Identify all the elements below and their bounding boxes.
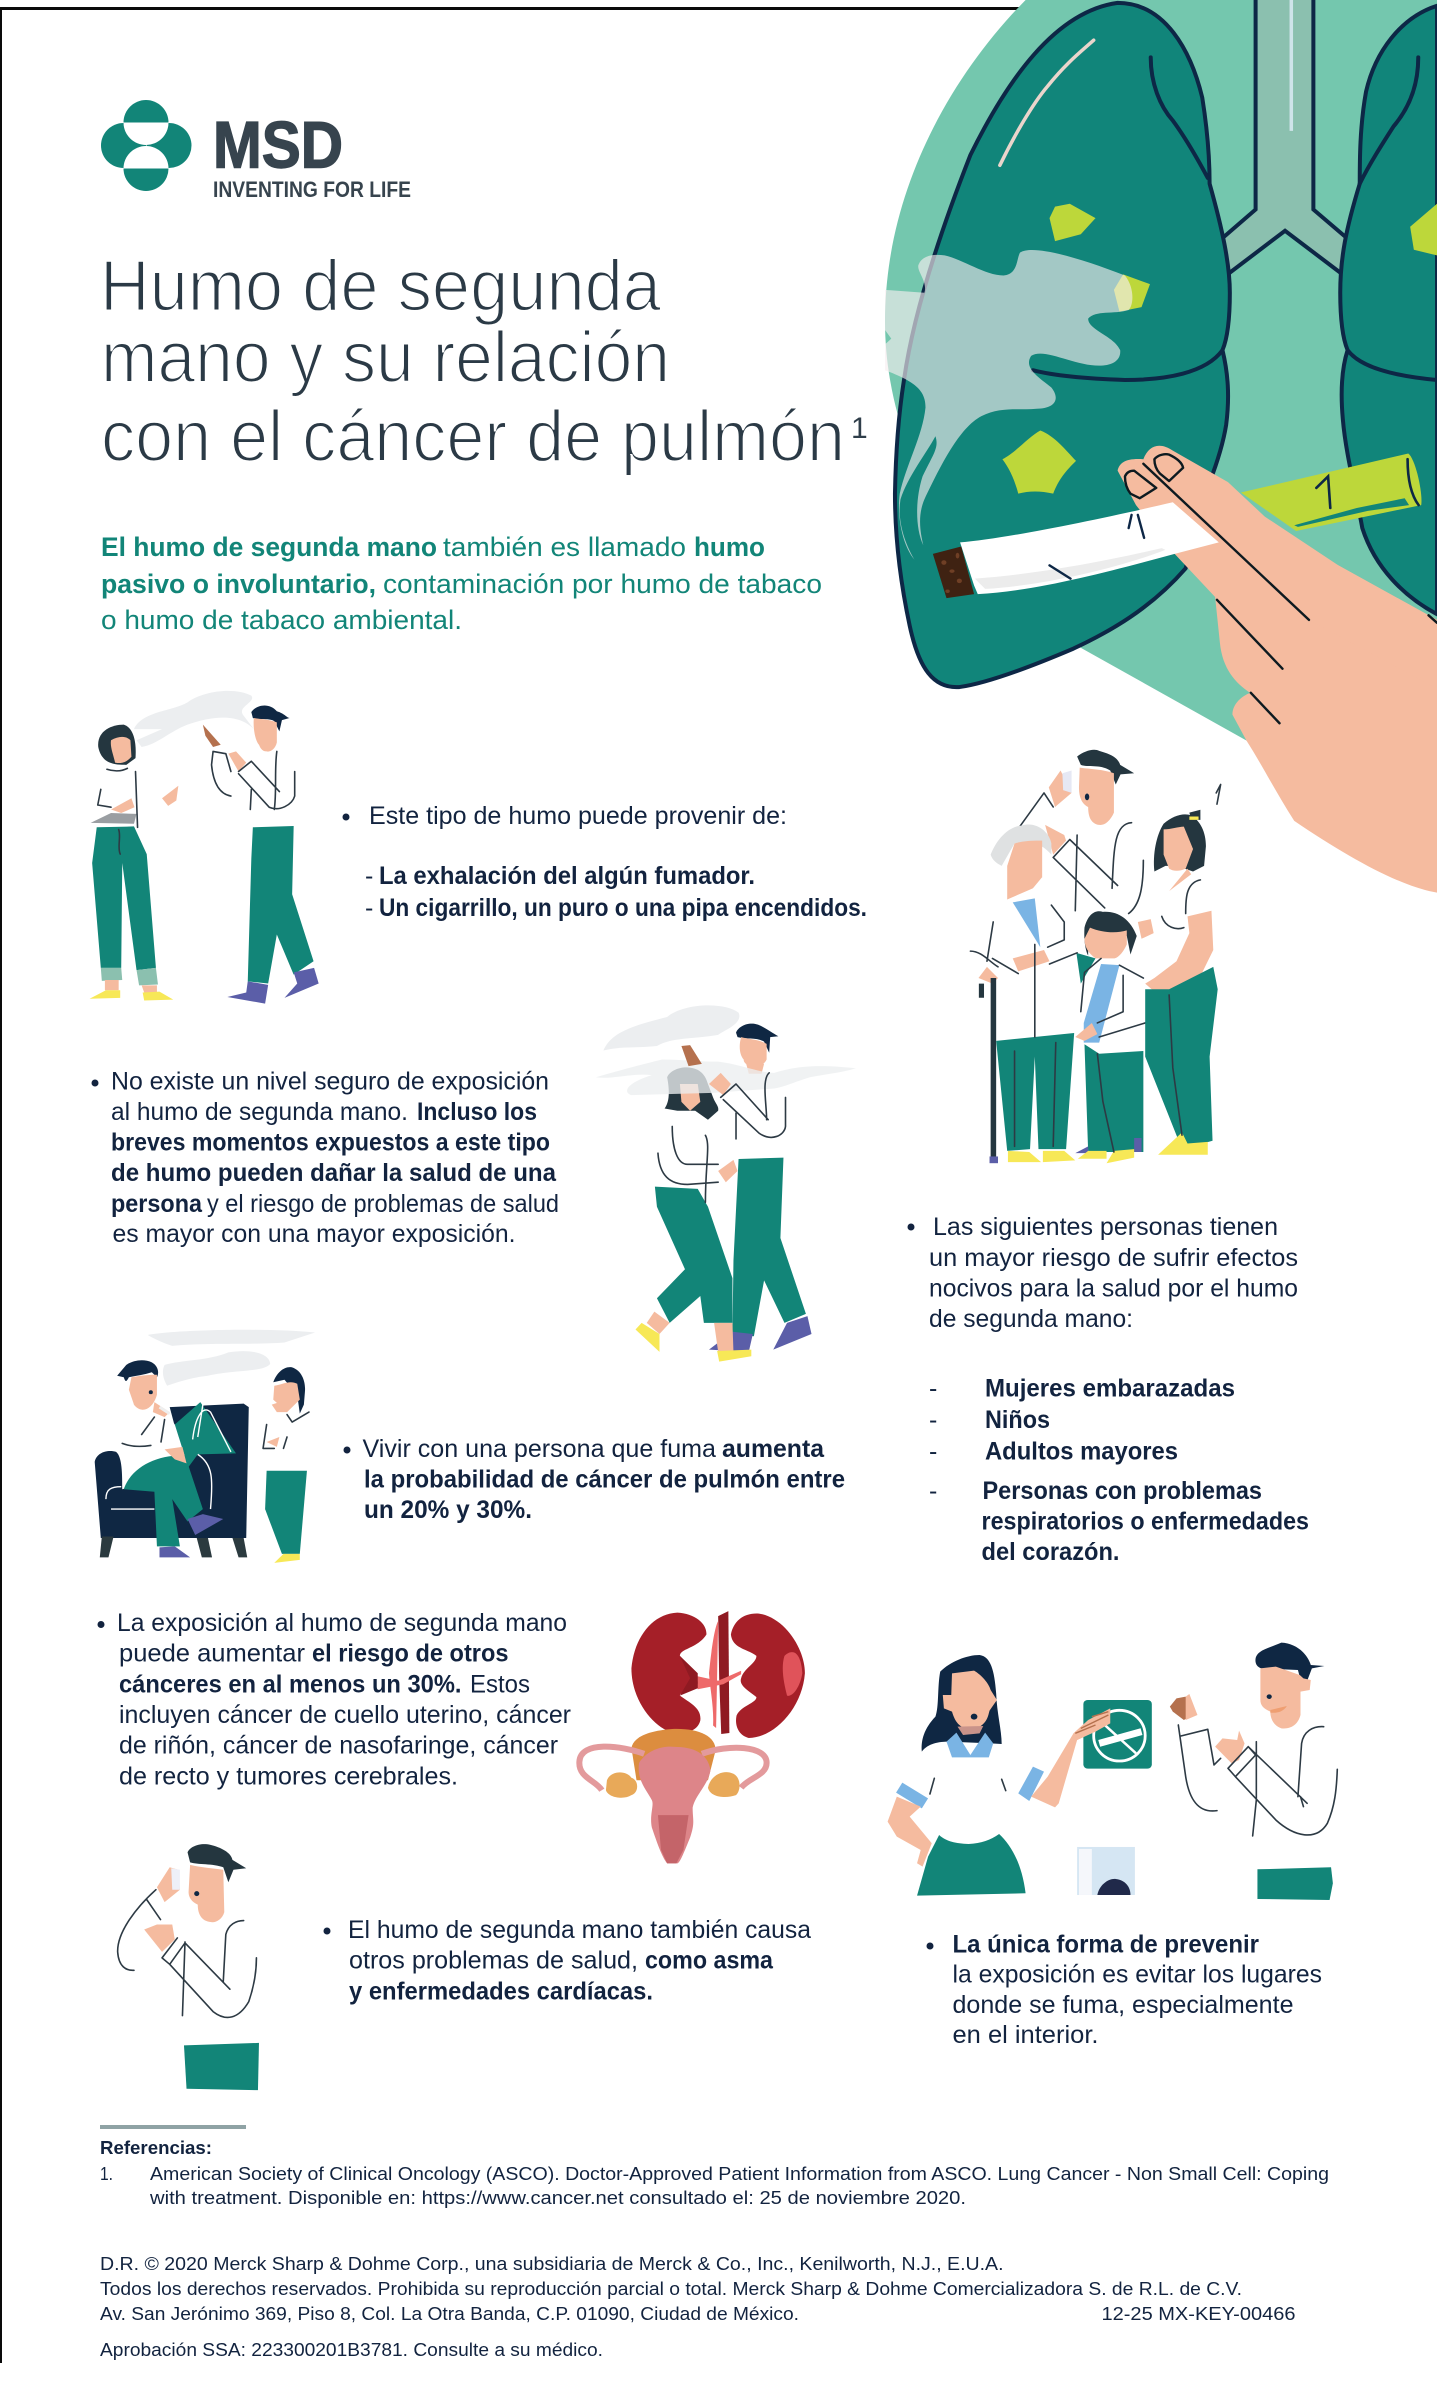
- text: other cancers: Estos: [470, 1670, 530, 1698]
- figure: family group: [970, 750, 1221, 1163]
- legal footer: 12-25 MX-KEY-00466: [1102, 2304, 1296, 2324]
- logo: MSD: [101, 100, 411, 202]
- intro paragraph: pasivo o involuntario,: [101, 569, 376, 599]
- figure: man in armchair and girl: [95, 1330, 315, 1563]
- figure: woman pointing to no smoking sign and man: [888, 1643, 1337, 1900]
- text: people at higher risk: nocivos para la salud por el humo: [929, 1274, 1298, 1302]
- bladder: [631, 1729, 716, 1780]
- intro paragraph: [101, 532, 822, 635]
- text: sources of smoke: La exhalación del algún fumador.: [379, 862, 755, 890]
- text: people at higher risk: Niños: [985, 1406, 1050, 1434]
- text: people at higher risk: [908, 1213, 1309, 1566]
- figure: woman and smoking man: [90, 691, 319, 1004]
- kidneys: [631, 1611, 805, 1738]
- legal footer: Av. San Jerónimo 369, Piso 8, Col. La Otra Banda, C.P. 01090, Ciudad de México.: [100, 2304, 799, 2324]
- logo: MSD: MSD: [213, 108, 343, 182]
- references: with treatment. Disponible en: https://www.cancer.net consultado el: 25 de noviembre 2020.: [149, 2188, 966, 2208]
- door fragment: [1077, 1847, 1135, 1895]
- text: people at higher risk: Personas con problemas: [982, 1477, 1262, 1505]
- legal footer: Todos los derechos reservados. Prohibida su reproducción parcial o total. Merck Sharp & Dohme Comercializadora S. de R.L. de C.V.: [100, 2279, 1242, 2299]
- text: no safe level: [92, 1068, 559, 1248]
- title: Humo de segunda: [100, 246, 662, 326]
- figure: man with cigarette, health problems: [118, 1844, 259, 2090]
- text: no safe level: y el riesgo de problemas de salud: [207, 1190, 559, 1218]
- cigarette: [933, 502, 1219, 598]
- title: mano y su relación: [101, 318, 670, 398]
- intro paragraph: también es llamado: [443, 532, 686, 562]
- text: people at higher risk: respiratorios o enfermedades: [982, 1508, 1309, 1536]
- text: people at higher risk: -: [929, 1374, 937, 1402]
- text: sources of smoke: Este tipo de humo puede provenir de:: [369, 802, 787, 830]
- text: other cancers: puede aumentar: [119, 1640, 305, 1668]
- text: other health problems: como asma: [645, 1946, 774, 1974]
- text: people at higher risk: -: [929, 1477, 937, 1505]
- text: no safe level: es mayor con una mayor exposición.: [112, 1220, 516, 1248]
- text: people at higher risk: de segunda mano:: [929, 1305, 1133, 1333]
- text: people at higher risk: -: [929, 1438, 937, 1466]
- text: other health problems: [324, 1916, 811, 2006]
- text: people at higher risk: Adultos mayores: [985, 1438, 1178, 1466]
- text: living with a smoker: aumenta: [722, 1435, 825, 1463]
- hero illustration: lungs, cigarette and hand: [885, 0, 1437, 893]
- text: other cancers: La exposición al humo de segunda mano: [117, 1609, 567, 1637]
- text: no safe level: persona: [111, 1190, 203, 1218]
- intro paragraph: contaminación por humo de tabaco: [383, 569, 822, 599]
- title: [100, 246, 868, 477]
- text: no safe level: No existe un nivel seguro de exposición: [111, 1068, 549, 1096]
- logo: MSD: INVENTING FOR LIFE: [213, 177, 411, 202]
- text: only way to prevent: [926, 1931, 1322, 2049]
- text: only way to prevent: La única forma de prevenir: [952, 1931, 1259, 1959]
- no smoking sign: [1073, 1700, 1152, 1769]
- text: sources of smoke: Un cigarrillo, un puro o una pipa encendidos.: [379, 894, 867, 922]
- references: 1.: [100, 2164, 113, 2184]
- hand upper finger: [1143, 446, 1437, 689]
- title: 1: [851, 412, 868, 445]
- cigarette filter: [1241, 453, 1421, 531]
- figure: couple walking with smoke: [596, 1005, 856, 1362]
- icon: kidneys and uterus: [579, 1611, 805, 1863]
- text: only way to prevent: en el interior.: [952, 2021, 1098, 2049]
- smoke over lung: [885, 250, 1132, 560]
- text: other cancers: el riesgo de otros: [312, 1640, 508, 1668]
- text: no safe level: Incluso los: [417, 1098, 537, 1126]
- finger lines and nails: [1125, 454, 1437, 723]
- text: people at higher risk: del corazón.: [982, 1538, 1120, 1566]
- right lung: [1340, 6, 1437, 614]
- fallopian tubes: [579, 1747, 767, 1790]
- text: other health problems: El humo de segunda mano también causa: [348, 1916, 811, 1944]
- intro paragraph: humo: [694, 532, 765, 562]
- text: people at higher risk: un mayor riesgo de sufrir efectos: [929, 1244, 1298, 1272]
- hand lower finger and palm: [1118, 459, 1437, 893]
- references: [100, 2125, 1329, 2208]
- title: con el cáncer de pulmón: [101, 397, 845, 477]
- text: other health problems: y enfermedades cardíacas.: [349, 1978, 653, 2006]
- legal footer: D.R. © 2020 Merck Sharp & Dohme Corp., una subsidiaria de Merck & Co., Inc., Kenilworth, N.J., E.U.A.: [100, 2254, 1004, 2274]
- text: only way to prevent: donde se fuma, especialmente: [952, 1991, 1294, 2019]
- left lung: [895, 3, 1230, 687]
- text: no safe level: al humo de segunda mano.: [111, 1098, 408, 1126]
- ovaries: [606, 1772, 740, 1798]
- text: other cancers: cánceres en al menos un 30%.: [119, 1670, 462, 1698]
- text: sources of smoke: -: [365, 894, 373, 922]
- text: living with a smoker: Vivir con una persona que fuma: [362, 1435, 716, 1463]
- text: sources of smoke: -: [365, 862, 373, 890]
- text: people at higher risk: Mujeres embarazadas: [985, 1374, 1235, 1402]
- text: other cancers: de riñón, cáncer de nasofaringe, cáncer: [119, 1732, 558, 1760]
- text: people at higher risk: -: [929, 1406, 937, 1434]
- intro paragraph: o humo de tabaco ambiental.: [101, 605, 462, 635]
- text: living with a smoker: [344, 1435, 845, 1524]
- text: other health problems: otros problemas de salud,: [349, 1946, 638, 1974]
- trachea and bronchi: [1224, 0, 1345, 273]
- background circle: [885, 0, 1437, 861]
- legal footer: [100, 2254, 1296, 2360]
- text: no safe level: breves momentos expuestos a este tipo: [111, 1128, 550, 1156]
- text: other cancers: [98, 1609, 571, 1790]
- text: living with a smoker: la probabilidad de cáncer de pulmón entre: [364, 1466, 845, 1494]
- uterus: [639, 1747, 711, 1863]
- references: Referencias:: [100, 2138, 212, 2158]
- text: other cancers: de recto y tumores cerebrales.: [119, 1762, 458, 1790]
- text: living with a smoker: un 20% y 30%.: [364, 1496, 532, 1524]
- text: only way to prevent: la exposición es evitar los lugares: [952, 1961, 1322, 1989]
- intro paragraph: El humo de segunda mano: [101, 532, 437, 562]
- text: no safe level: de humo pueden dañar la salud de una: [111, 1159, 557, 1187]
- legal footer: Aprobación SSA: 223300201B3781. Consulte a su médico.: [100, 2340, 603, 2360]
- references: American Society of Clinical Oncology (ASCO). Doctor-Approved Patient Information from ASCO. Lung Cancer - Non Small Cell: Coping: [150, 2164, 1329, 2184]
- text: other cancers: incluyen cáncer de cuello uterino, cáncer: [119, 1701, 571, 1729]
- text: sources of smoke: [342, 802, 867, 922]
- text: people at higher risk: Las siguientes personas tienen: [933, 1213, 1278, 1241]
